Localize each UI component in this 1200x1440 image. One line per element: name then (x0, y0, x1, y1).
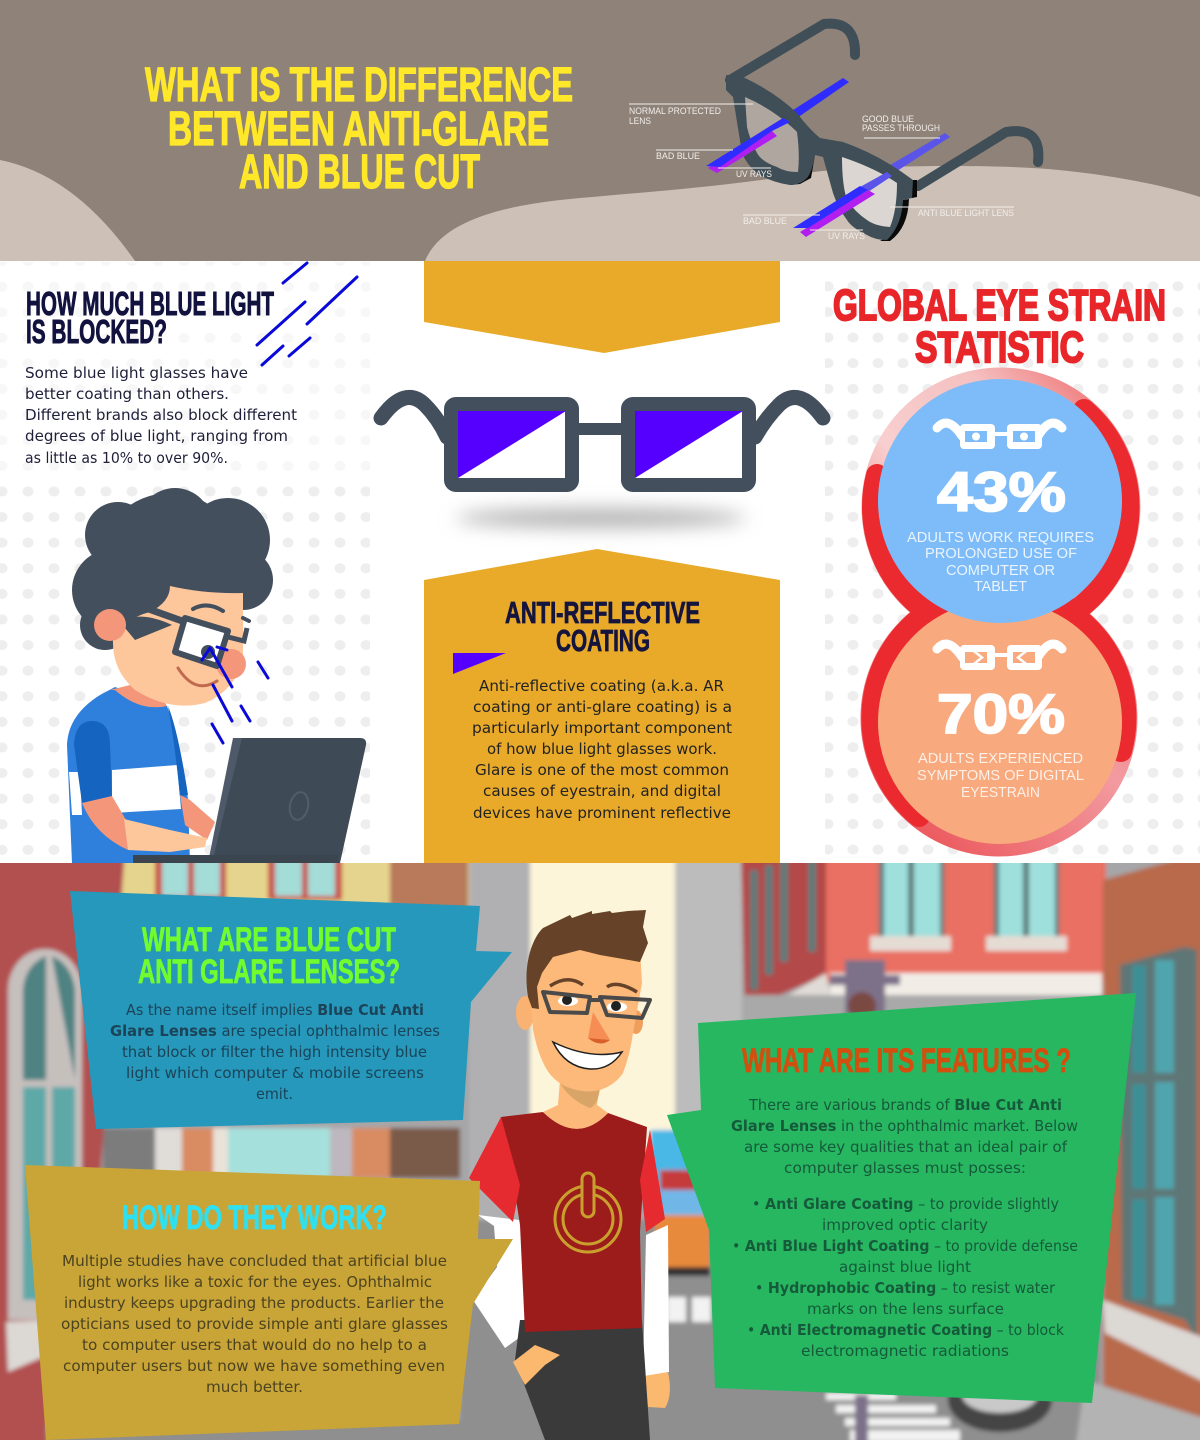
street background (0, 863, 1200, 1440)
text block: anti-reflective: particularly important component (472, 719, 732, 737)
illustration: square glasses (381, 397, 823, 528)
icon: glasses white (937, 423, 1062, 449)
text block: blue light blocked: as little as 10% to over 90%. (25, 449, 228, 467)
stat caption 43%: PROLONGED USE OF (925, 545, 1077, 562)
text block: features intro: computer glasses must posses: (784, 1159, 1026, 1177)
heading: how much blue light: HOW MUCH BLUE LIGHT (26, 285, 274, 322)
heading: how much blue light: IS BLOCKED? (26, 313, 167, 350)
glasses diagram labels: LENS (629, 116, 651, 126)
text block: anti-reflective (472, 677, 732, 822)
text block: features intro: There are various brands of Blue Cut Anti (748, 1096, 1062, 1114)
text block: how they work: Multiple studies have concluded that artificial blue (62, 1252, 447, 1270)
stat caption 43%: ADULTS WORK REQUIRES (907, 529, 1094, 546)
text block: anti-reflective: of how blue light glasses work. (487, 740, 717, 758)
heading: blue cut anti glare: ANTI GLARE LENSES? (138, 953, 400, 991)
stat caption 70%: EYESTRAIN (961, 784, 1040, 801)
stat circle: 70% (878, 600, 1122, 844)
stat circle: 43%: 43% (937, 460, 1066, 523)
text block: anti-reflective: devices have prominent reflective (473, 804, 731, 822)
text block: blue cut definition (110, 1001, 440, 1103)
glasses diagram labels: BAD BLUE (656, 151, 700, 161)
list: coating features: improved optic clarity (822, 1216, 988, 1234)
stat caption 43%: TABLET (974, 578, 1027, 595)
blue light rays top left (257, 263, 357, 365)
icon: glasses white (937, 644, 1062, 670)
chart: statistic circles (869, 376, 1132, 848)
stat caption 43%: COMPUTER OR (946, 562, 1055, 579)
panel: how do they work (25, 1165, 513, 1440)
list: coating features: marks on the lens surface (807, 1300, 1004, 1318)
stat caption 43% (907, 529, 1094, 595)
text block: anti-reflective: Glare is one of the most common (475, 761, 729, 779)
illustration: smiling man with glasses (469, 910, 670, 1440)
text block: features intro: are some key qualities that an ideal pair of (744, 1138, 1068, 1156)
middle section background with dots (0, 261, 1200, 863)
text block: how they work: industry keeps upgrading the products. Earlier the (64, 1294, 444, 1312)
panel: what are its features (667, 993, 1136, 1403)
text block: how they work: much better. (206, 1378, 303, 1396)
list: coating features: • Hydrophobic Coating – to resist water (755, 1279, 1056, 1297)
title: BETWEEN ANTI-GLARE (168, 103, 549, 156)
heading: global eye strain: STATISTIC (915, 323, 1084, 372)
stat caption 70% (917, 750, 1084, 801)
heading: anti-reflective coating: ANTI-REFLECTIVE (505, 595, 700, 630)
icon: isometric glasses diagram (706, 24, 1038, 241)
glasses diagram labels: GOOD BLUE (862, 114, 914, 124)
heading: global eye strain (833, 281, 1166, 372)
text block: features intro: Glare Lenses in the ophthalmic market. Below (731, 1117, 1078, 1135)
heading: anti-reflective coating: COATING (556, 623, 650, 658)
text block: blue light blocked: better coating than others. (25, 385, 229, 403)
heading: blue cut anti glare: WHAT ARE BLUE CUT (142, 921, 396, 959)
glasses diagram labels: BAD BLUE (743, 216, 787, 226)
stat caption 70%: SYMPTOMS OF DIGITAL (917, 767, 1084, 784)
text block: features intro (731, 1096, 1078, 1177)
list: coating features: electromagnetic radiations (801, 1342, 1009, 1360)
text block: how they work: to computer users that would do no help to a (82, 1336, 427, 1354)
glasses diagram labels: UV RAYS (828, 231, 865, 241)
text block: blue cut definition: that block or filter the high intensity blue (122, 1043, 427, 1061)
list: coating features: • Anti Blue Light Coating – to provide defense (732, 1237, 1078, 1255)
text block: blue light blocked (25, 364, 297, 467)
text block: blue cut definition: emit. (256, 1085, 293, 1103)
illustration: boy at laptop (67, 488, 366, 863)
text block: blue cut definition: light which computer & mobile screens (126, 1064, 424, 1082)
stat circle: 70%: 70% (937, 682, 1065, 745)
text block: anti-reflective: causes of eyestrain, and digital (483, 782, 721, 800)
text block: how they work: computer users but now we have something even (63, 1357, 445, 1375)
title: AND BLUE CUT (239, 146, 480, 199)
text block: blue cut definition: As the name itself implies Blue Cut Anti (126, 1001, 424, 1019)
heading: blue cut anti glare (138, 921, 400, 991)
stat circle: 43% (878, 379, 1122, 623)
list: coating features: against blue light (839, 1258, 971, 1276)
heading: how do they work: HOW DO THEY WORK? (122, 1199, 387, 1237)
text block: how they work (61, 1252, 448, 1396)
text block: blue light blocked: degrees of blue light, ranging from (25, 427, 288, 445)
text block: how they work: light works like a toxic for the eyes. Ophthalmic (78, 1273, 432, 1291)
text block: how they work: opticians used to provide simple anti glare glasses (61, 1315, 448, 1333)
text block: blue light blocked: Some blue light glasses have (25, 364, 248, 382)
text block: blue cut definition: Glare Lenses are special ophthalmic lenses (110, 1022, 440, 1040)
glasses diagram labels (629, 104, 1014, 241)
title (145, 59, 573, 199)
header band (0, 0, 1200, 261)
heading: anti-reflective coating (505, 595, 700, 658)
panel: what are blue cut lenses (70, 891, 512, 1129)
panel: anti-reflective coating (424, 549, 780, 863)
icon: purple flag (453, 653, 506, 674)
heading: features: WHAT ARE ITS FEATURES ? (742, 1042, 1071, 1080)
glasses diagram labels: UV RAYS (736, 169, 772, 179)
list: coating features: • Anti Glare Coating – to provide slightly (752, 1195, 1059, 1213)
glasses diagram labels: NORMAL PROTECTED (629, 106, 721, 116)
glasses diagram labels: ANTI BLUE LIGHT LENS (918, 208, 1014, 218)
list: coating features (732, 1195, 1078, 1360)
text block: anti-reflective: Anti-reflective coating (a.k.a. AR (479, 677, 724, 695)
glasses diagram labels: PASSES THROUGH (862, 123, 940, 133)
list: coating features: • Anti Electromagnetic Coating – to block (747, 1321, 1064, 1339)
text block: blue light blocked: Different brands also block different (25, 406, 297, 424)
gold top banner (424, 261, 780, 353)
title: WHAT IS THE DIFFERENCE (145, 59, 573, 112)
text block: anti-reflective: coating or anti-glare coating) is a (473, 698, 732, 716)
heading: how much blue light (26, 285, 274, 350)
stat caption 70%: ADULTS EXPERIENCED (918, 750, 1083, 767)
